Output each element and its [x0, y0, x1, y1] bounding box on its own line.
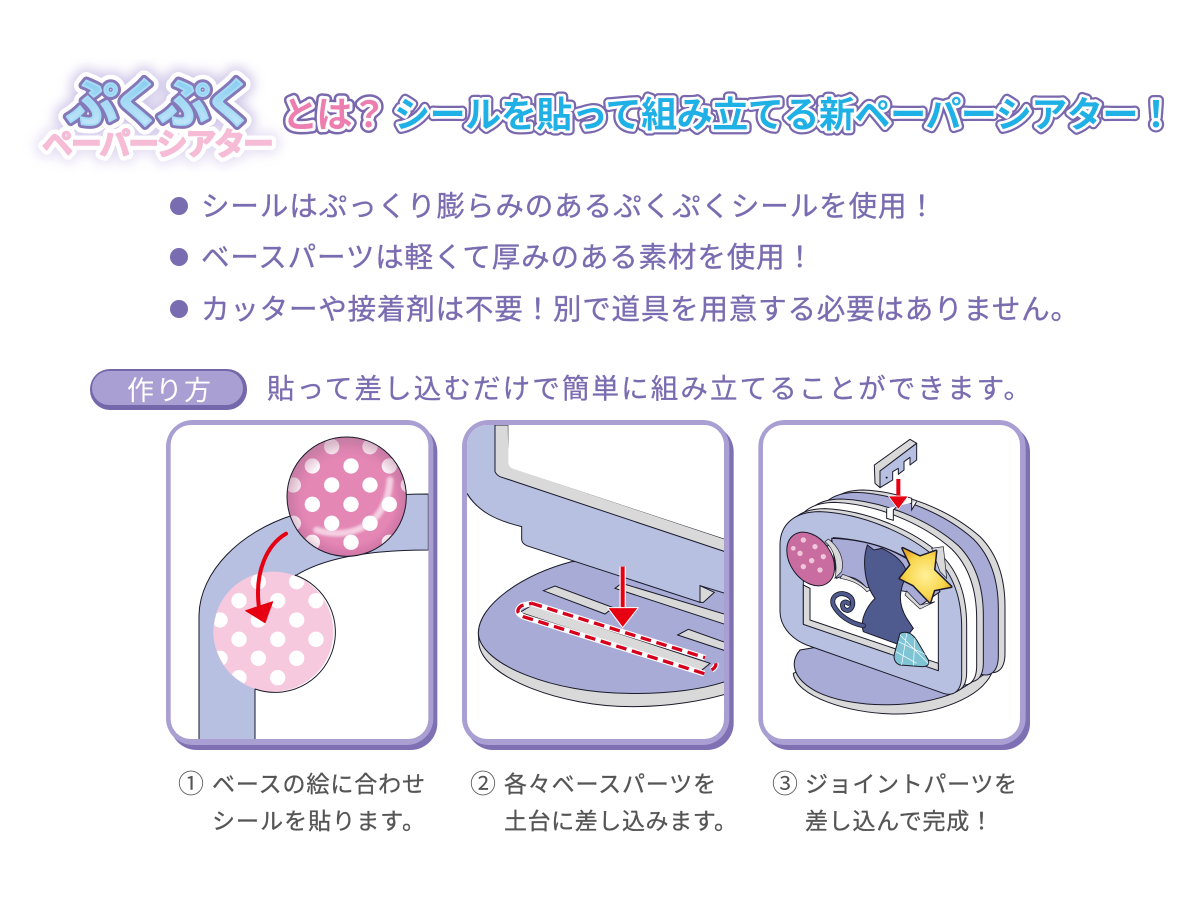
logo: ペーパーシアター [42, 127, 274, 162]
upright plate [465, 425, 725, 602]
panel: step 1 [166, 420, 437, 750]
puffy sticker [286, 437, 416, 556]
caption: step 3 [772, 769, 1017, 834]
joint part [874, 439, 917, 488]
how-to badge: 作り方 [127, 376, 211, 406]
logo: ぷくぷく [66, 76, 256, 134]
title: question: とは？ [282, 94, 387, 135]
highlighted slot [518, 603, 716, 674]
title: tagline: シールを貼って組み立てる新ペーパーシアター！ [394, 94, 1174, 135]
icon: blue triangle sticker [894, 632, 929, 667]
logo: ぷくぷく [66, 76, 256, 134]
icon: pink balloon sticker [777, 523, 844, 595]
caption: step 3: ③ [772, 769, 798, 799]
base disc [793, 642, 992, 714]
window scene [803, 538, 947, 671]
icon: cat sticker [833, 545, 913, 645]
arrow [608, 567, 638, 628]
icon: star sticker [900, 548, 951, 602]
title: tagline: シールを貼って組み立てる新ペーパーシアター！ [394, 94, 1174, 135]
logo [42, 76, 274, 162]
lower sticker guide [212, 572, 335, 692]
logo: ぷくぷく [66, 76, 256, 134]
caption: step 3: ジョイントパーツを [805, 771, 1017, 797]
top notches [887, 497, 917, 520]
front plate [780, 512, 962, 694]
bullet 3: カッターや接着剤は不要！別で道具を用意する必要はありません。 [201, 294, 1079, 326]
caption: step 1: ベースの絵に合わせ [212, 771, 425, 797]
caption: step 1: シールを貼ります。 [212, 808, 425, 834]
logo: ぷくぷく [66, 76, 256, 134]
bullet 1: シールはぷっくり膨らみのあるぷくぷくシールを使用！ [201, 191, 936, 223]
title: question: とは？ [282, 94, 387, 135]
how-to heading: 貼って差し込むだけで簡単に組み立てることができます。 [267, 373, 1031, 404]
logo: ペーパーシアター [42, 127, 274, 162]
caption: step 1: ① [178, 769, 204, 799]
caption: step 2: 土台に差し込みます。 [504, 808, 737, 834]
arrow [888, 479, 908, 509]
caption: step 2: 各々ベースパーツを [504, 771, 716, 797]
caption: step 1 [178, 769, 425, 834]
how-to badge [90, 369, 247, 410]
caption: step 2: ② [470, 769, 496, 799]
base disc [478, 558, 725, 707]
bullet list [170, 191, 1079, 326]
panel: step 2 [462, 420, 734, 750]
caption: step 2 [470, 769, 737, 834]
logo: ペーパーシアター [42, 127, 274, 162]
bullet 2: ベースパーツは軽くて厚みのある素材を使用！ [201, 242, 814, 274]
title: question: とは？ [282, 94, 387, 135]
caption: step 3: 差し込んで完成！ [805, 808, 993, 834]
panel: step 3 [758, 420, 1030, 750]
arrow [246, 534, 286, 623]
back plates [785, 490, 1005, 691]
title: tagline: シールを貼って組み立てる新ペーパーシアター！ [394, 94, 1174, 135]
base frame [199, 494, 428, 740]
